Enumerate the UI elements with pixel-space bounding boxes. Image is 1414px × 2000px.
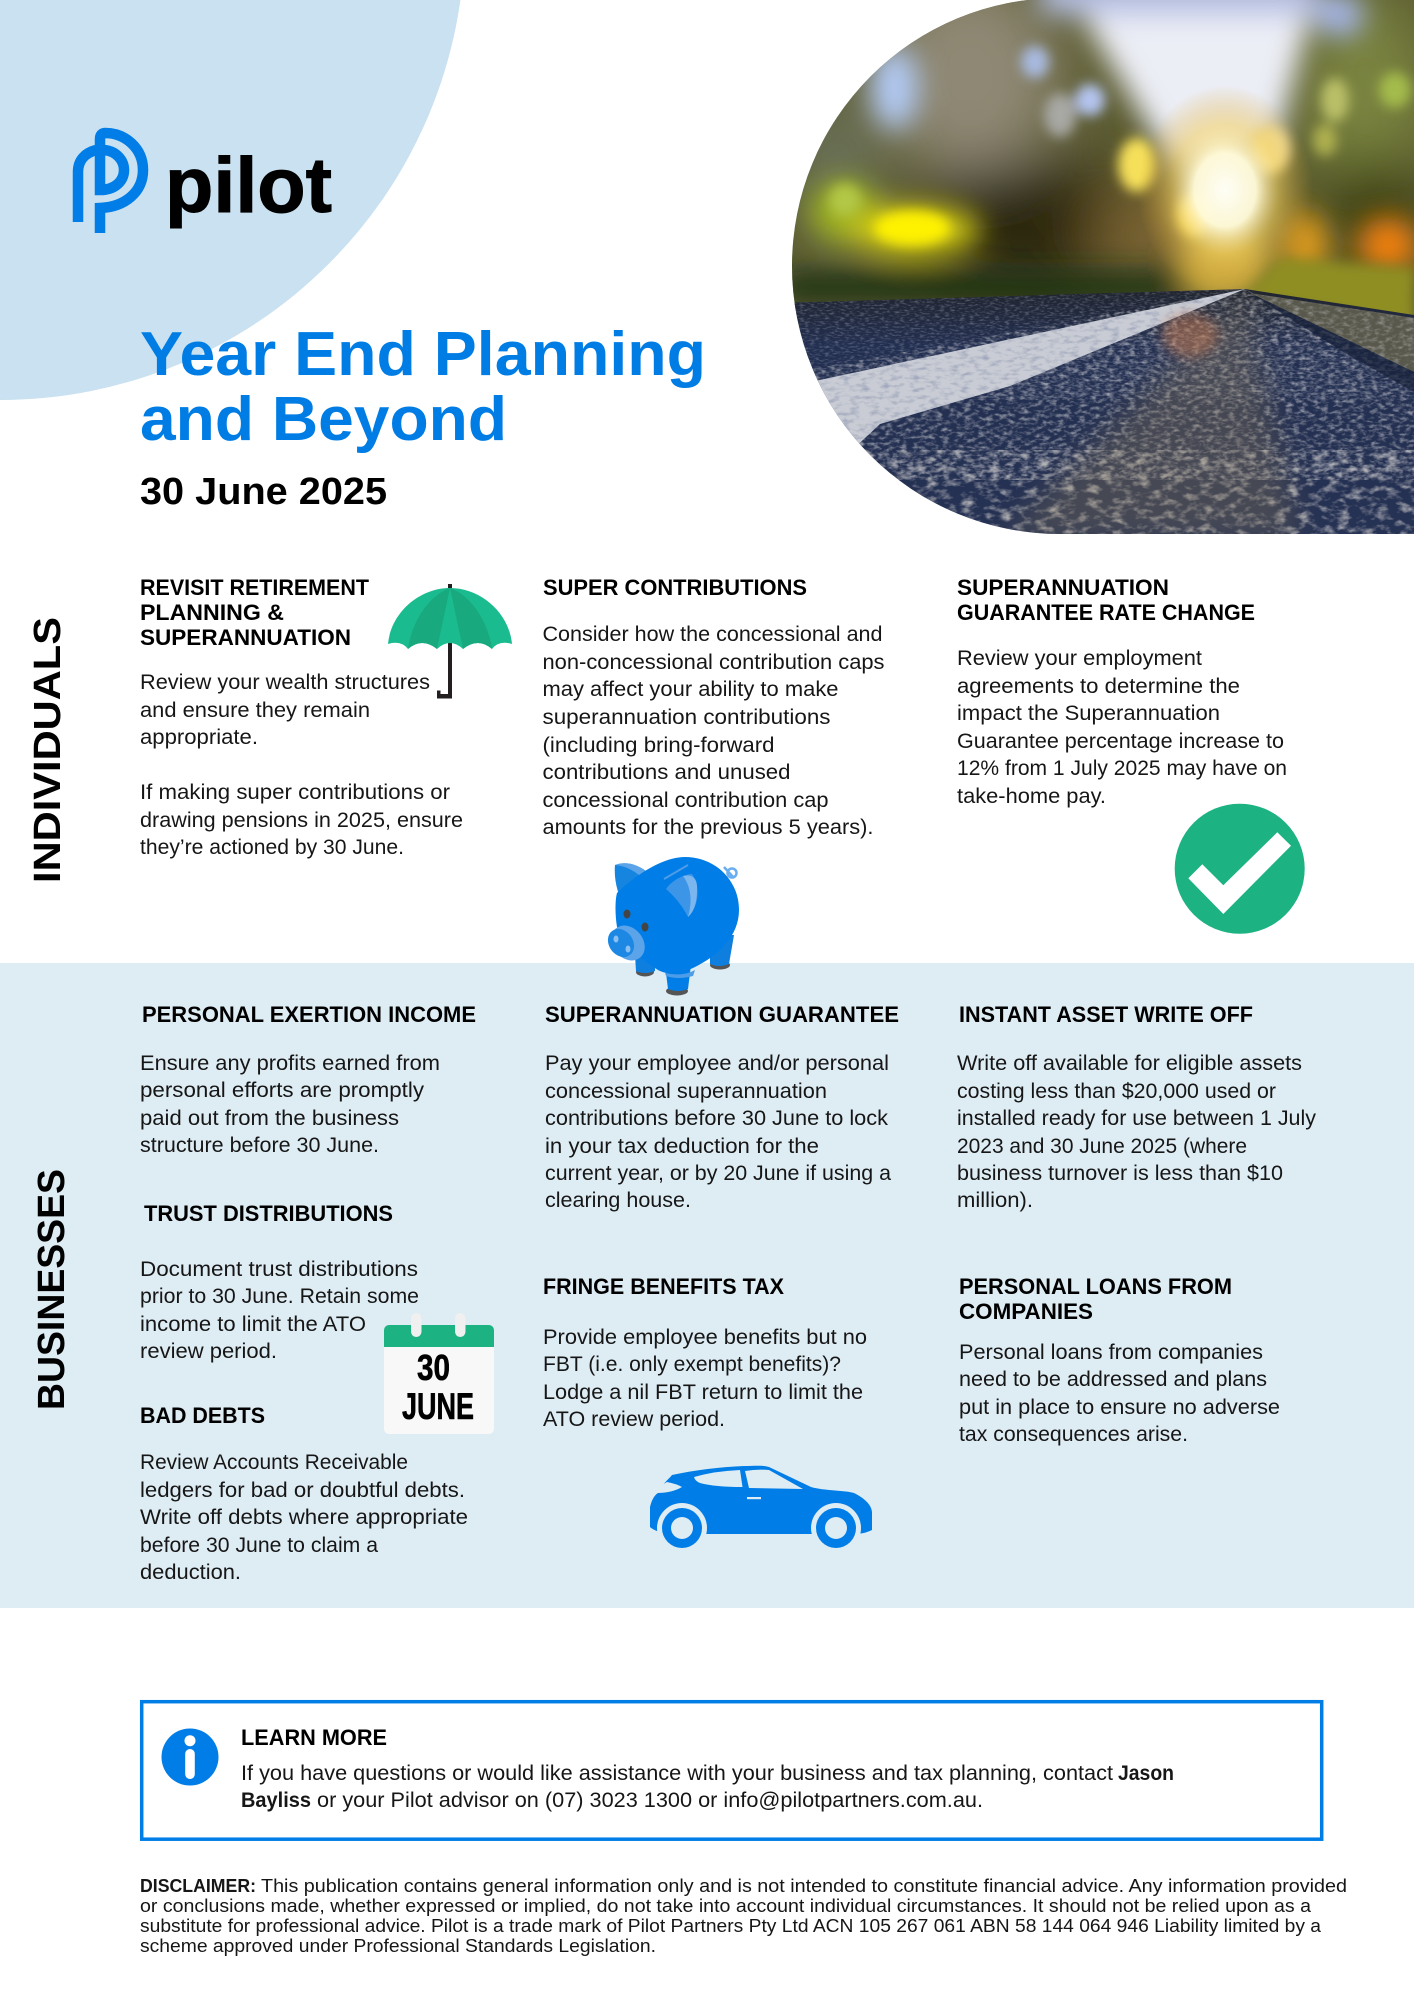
panel: personal loans from companies — [959, 1274, 1280, 1446]
heading: revisit retirement — [140, 575, 369, 650]
text: guarantee body: contributions before 30 June to lock — [545, 1106, 888, 1130]
heading: instant asset write off: INSTANT ASSET WRITE OFF — [959, 1002, 1253, 1027]
title — [140, 320, 706, 454]
text: personal exertion body: paid out from the business — [140, 1106, 399, 1130]
heading: trust distributions: TRUST DISTRIBUTIONS — [144, 1201, 393, 1226]
text: super contributions body: concessional contribution cap — [542, 788, 829, 812]
disclaimer — [140, 1875, 1347, 1956]
heading: rate change: SUPERANNUATION — [957, 575, 1169, 600]
panel: superannuation guarantee rate change — [957, 575, 1305, 934]
text: trust body: review period. — [140, 1339, 277, 1363]
panel: instant asset write off — [957, 1002, 1316, 1212]
text: fbt body: FBT (i.e. only exempt benefits)? — [543, 1352, 841, 1376]
text: super contributions body: (including bring-forward — [542, 733, 774, 757]
text: rate change body: Review your employment — [957, 646, 1202, 670]
callout: learn more — [142, 1702, 1322, 1839]
disclaimer: substitute for professional advice. Pilot is a trade mark of Pilot Partners Pty Ltd ACN 105 267 061 ABN 58 144 064 946 Liability limited by a — [140, 1915, 1322, 1936]
text: personal loans body: need to be addressed and plans — [959, 1367, 1267, 1391]
text: contact details: Bayliss — [241, 1788, 311, 1812]
text: retirement body: Review your wealth structures — [140, 670, 430, 694]
text: bad debts body: before 30 June to claim a — [140, 1533, 378, 1557]
disclaimer: This publication contains general information only and is not intended to constitute financial advice. Any information provided — [261, 1875, 1347, 1896]
text: asset write off body: business turnover is less than $10 — [957, 1161, 1283, 1185]
text: retirement body: drawing pensions in 2025, ensure — [140, 808, 463, 832]
section label: businesses: BUSINESSES — [31, 1169, 73, 1410]
text: super contributions body: may affect your ability to make — [542, 677, 838, 701]
panel: superannuation guarantee — [545, 1002, 899, 1212]
heading: revisit retirement: PLANNING & — [140, 600, 284, 625]
title: and Beyond — [140, 385, 507, 454]
text: asset write off body: Write off available for eligible assets — [957, 1051, 1302, 1075]
text: guarantee body: concessional superannuation — [545, 1079, 827, 1103]
text: fbt body — [543, 1325, 867, 1431]
text: rate change body: take-home pay. — [957, 784, 1106, 808]
icon: info — [162, 1728, 218, 1786]
heading: revisit retirement: REVISIT RETIREMENT — [140, 575, 369, 600]
text: rate change body: Guarantee percentage increase to — [957, 729, 1284, 753]
text: rate change body: 12% from 1 July 2025 may have on — [957, 756, 1287, 780]
photo: sunlit road — [780, 0, 1414, 540]
panel: fringe benefits tax — [543, 1274, 867, 1431]
panel: personal exertion income — [140, 1002, 476, 1157]
disclaimer: scheme approved under Professional Standards Legislation. — [140, 1935, 656, 1956]
text: bad debts body: Review Accounts Receivable — [140, 1450, 408, 1474]
icon: calendar 30 June — [384, 1313, 494, 1434]
heading: personal loans: PERSONAL LOANS FROM — [959, 1274, 1232, 1299]
text: bad debts body: deduction. — [140, 1560, 241, 1584]
text: personal loans body: Personal loans from companies — [959, 1340, 1263, 1364]
panel: super contributions — [542, 575, 884, 839]
text: contact details: If you have questions or would like assistance with your business and tax planning, contact — [241, 1761, 1113, 1785]
text: asset write off body — [957, 1051, 1316, 1212]
text: guarantee body: current year, or by 20 June if using a — [545, 1161, 891, 1185]
text: trust body: prior to 30 June. Retain some — [140, 1284, 419, 1308]
text: retirement body: they’re actioned by 30 June. — [140, 835, 404, 859]
heading: learn more: LEARN MORE — [241, 1725, 387, 1750]
warm light on road — [1000, 292, 1300, 540]
sun reflection — [1162, 313, 1218, 357]
text: guarantee body: Pay your employee and/or personal — [545, 1051, 889, 1075]
text: guarantee body: in your tax deduction for the — [545, 1134, 819, 1158]
text: contact details — [241, 1761, 1174, 1812]
businesses background panel — [0, 963, 1414, 1608]
text: rate change body: agreements to determine the — [957, 674, 1240, 698]
text: super contributions body: contributions and unused — [542, 760, 790, 784]
heading: rate change: GUARANTEE RATE CHANGE — [957, 600, 1255, 625]
disclaimer: or conclusions made, whether expressed or implied, do not take into account individual circumstances. It should not be relied upon as a — [140, 1895, 1312, 1916]
text: trust body: Document trust distributions — [140, 1257, 418, 1281]
text: retirement body: If making super contributions or — [140, 780, 450, 804]
heading: rate change — [957, 575, 1255, 625]
text: super contributions body: superannuation contributions — [542, 705, 830, 729]
logo wordmark: pilot — [165, 141, 332, 229]
text: bad debts body: Write off debts where appropriate — [140, 1505, 468, 1529]
heading: bad debts: BAD DEBTS — [140, 1403, 265, 1428]
heading: fringe benefits tax: FRINGE BENEFITS TAX — [543, 1274, 784, 1299]
road white line — [815, 289, 1245, 452]
text: personal exertion body: structure before 30 June. — [140, 1133, 379, 1157]
panel: bad debts — [140, 1403, 468, 1584]
text: retirement body — [140, 670, 463, 859]
text: bad debts body — [140, 1450, 468, 1584]
text: asset write off body: million). — [957, 1188, 1033, 1212]
icon: car — [650, 1466, 872, 1553]
text: trust body: income to limit the ATO — [140, 1312, 366, 1336]
text: bad debts body: ledgers for bad or doubtful debts. — [140, 1478, 465, 1502]
text: super contributions body — [542, 622, 884, 839]
text: personal loans body: tax consequences arise. — [959, 1422, 1188, 1446]
text: personal exertion body: Ensure any profits earned from — [140, 1051, 440, 1075]
text: personal exertion body: personal efforts are promptly — [140, 1078, 424, 1102]
icon: umbrella — [388, 584, 512, 698]
text: rate change body: impact the Superannuation — [957, 701, 1220, 725]
heading: personal loans: COMPANIES — [959, 1299, 1093, 1324]
text: asset write off body: 2023 and 30 June 2025 (where — [957, 1134, 1247, 1158]
heading: super contributions: SUPER CONTRIBUTIONS — [543, 575, 807, 600]
heading: revisit retirement: SUPERANNUATION — [140, 625, 351, 650]
icon: piggy bank — [603, 857, 739, 996]
text: guarantee body — [545, 1051, 891, 1212]
text: personal loans body: put in place to ensure no adverse — [959, 1395, 1280, 1419]
icon: green check — [1175, 804, 1305, 934]
text: asset write off body: installed ready for use between 1 July — [957, 1106, 1316, 1130]
icon: calendar 30 June: JUNE — [402, 1386, 474, 1427]
text: contact details: or your Pilot advisor on (07) 3023 1300 or info@pilotpartners.com.au. — [317, 1788, 983, 1812]
subtitle date: 30 June 2025 — [140, 471, 387, 513]
panel: revisit retirement planning — [140, 575, 512, 859]
section label: individuals: INDIVIDUALS — [27, 617, 69, 883]
logo: pilot — [78, 133, 332, 233]
text: personal loans body — [959, 1340, 1280, 1446]
icon: calendar 30 June: 30 — [417, 1347, 450, 1388]
text: fbt body: Provide employee benefits but no — [543, 1325, 867, 1349]
text: fbt body: ATO review period. — [543, 1407, 725, 1431]
heading: personal loans — [959, 1274, 1232, 1324]
text: personal exertion body — [140, 1051, 440, 1157]
text: super contributions body: amounts for the previous 5 years). — [542, 815, 874, 839]
road surface — [780, 289, 1414, 540]
disclaimer: DISCLAIMER: — [140, 1875, 256, 1896]
text: fbt body: Lodge a nil FBT return to limit the — [543, 1380, 863, 1404]
road shoulder — [1250, 293, 1414, 392]
panel: trust distributions — [140, 1201, 419, 1363]
text: retirement body: appropriate. — [140, 725, 258, 749]
text: rate change body — [957, 646, 1287, 808]
text: contact details: Jason — [1118, 1761, 1174, 1785]
text: trust body — [140, 1257, 419, 1363]
text: super contributions body: Consider how the concessional and — [542, 622, 882, 646]
text: asset write off body: costing less than $20,000 used or — [957, 1079, 1276, 1103]
text: retirement body: and ensure they remain — [140, 698, 370, 722]
heading: personal exertion income: PERSONAL EXERTION INCOME — [142, 1002, 476, 1027]
title: Year End Planning — [140, 320, 706, 389]
heading: superannuation guarantee: SUPERANNUATION GUARANTEE — [545, 1002, 899, 1027]
panel: light blue corner shape — [0, 0, 465, 400]
icon: pilot P mark — [78, 133, 143, 233]
grass verge — [1247, 253, 1414, 315]
text: guarantee body: clearing house. — [545, 1188, 691, 1212]
text: super contributions body: non-concessional contribution caps — [542, 650, 884, 674]
